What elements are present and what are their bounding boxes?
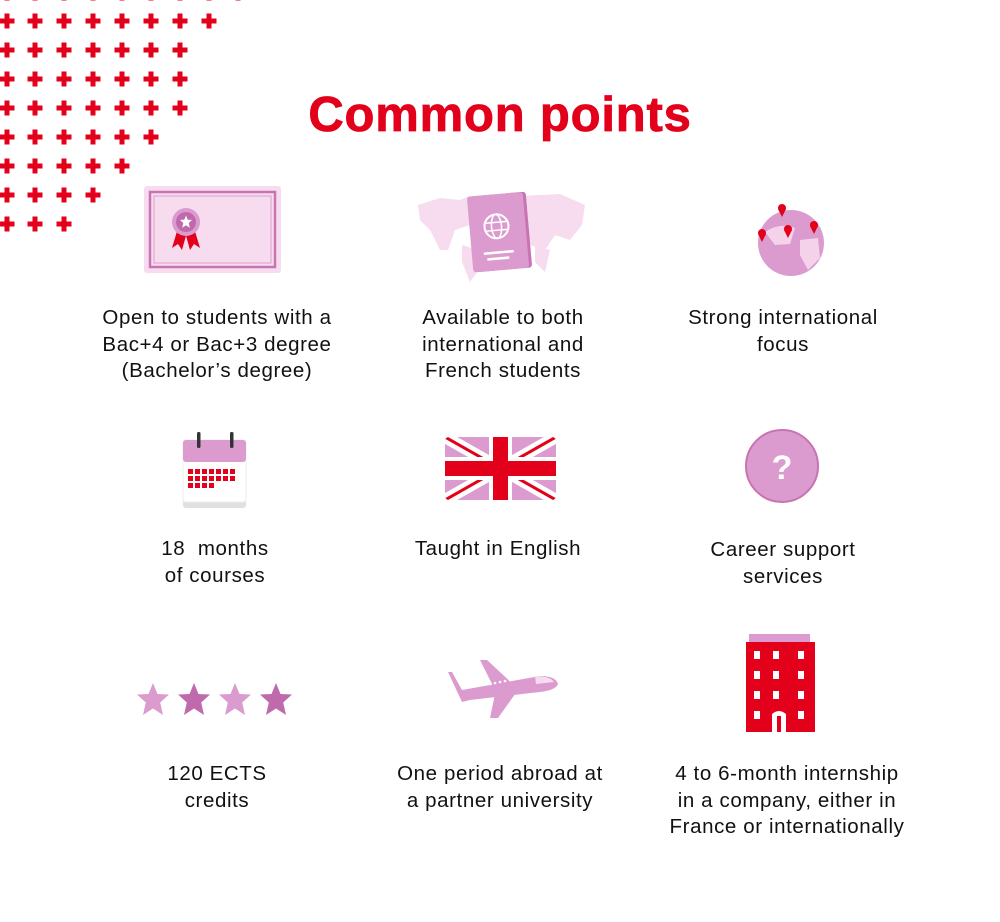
text: months xyxy=(161,537,269,586)
text: bachelor: Open to students with a xyxy=(102,306,332,329)
text: months: of courses xyxy=(165,564,265,586)
icon: airplane xyxy=(448,660,558,718)
text: english: Taught in English xyxy=(415,537,581,560)
text: availability: French students xyxy=(425,359,581,382)
text: international: Strong international xyxy=(688,306,878,329)
text: internship: in a company, either in xyxy=(678,788,896,812)
text: career: Career support xyxy=(710,538,856,561)
text: international: focus xyxy=(757,332,809,356)
text: availability xyxy=(422,306,584,382)
text: bachelor: Bac+4 or Bac+3 degree xyxy=(102,332,332,356)
text: international xyxy=(688,306,878,356)
icon: stars xyxy=(137,683,292,715)
text: availability: international and xyxy=(422,332,584,356)
text: availability: Available to both xyxy=(422,306,584,329)
icon: question circle xyxy=(746,430,818,502)
text: career xyxy=(710,538,856,588)
text: abroad: a partner university xyxy=(407,788,593,812)
text: abroad: One period abroad at xyxy=(397,762,603,785)
text: internship xyxy=(670,762,904,838)
icon: UK flag xyxy=(445,437,556,500)
text: ects xyxy=(167,762,267,812)
text: internship: France or internationally xyxy=(670,815,904,838)
title: Common points xyxy=(308,88,692,142)
decorative crosses xyxy=(0,0,246,232)
text: ects: credits xyxy=(185,788,249,812)
text: bachelor: (Bachelor’s degree) xyxy=(122,359,312,382)
icon: building xyxy=(746,634,815,732)
icon: calendar xyxy=(183,432,246,508)
icon: question circle: ? xyxy=(772,449,792,487)
icon: globe with pins xyxy=(758,204,824,276)
text: months: 18 months xyxy=(161,537,269,560)
icon: passport over world map xyxy=(418,192,585,282)
text: internship: 4 to 6-month internship xyxy=(675,762,899,785)
text: ects: 120 ECTS xyxy=(167,762,267,785)
text: abroad xyxy=(397,762,603,812)
text: bachelor xyxy=(102,306,332,382)
icon: certificate xyxy=(144,186,281,273)
text: career: services xyxy=(743,564,823,588)
